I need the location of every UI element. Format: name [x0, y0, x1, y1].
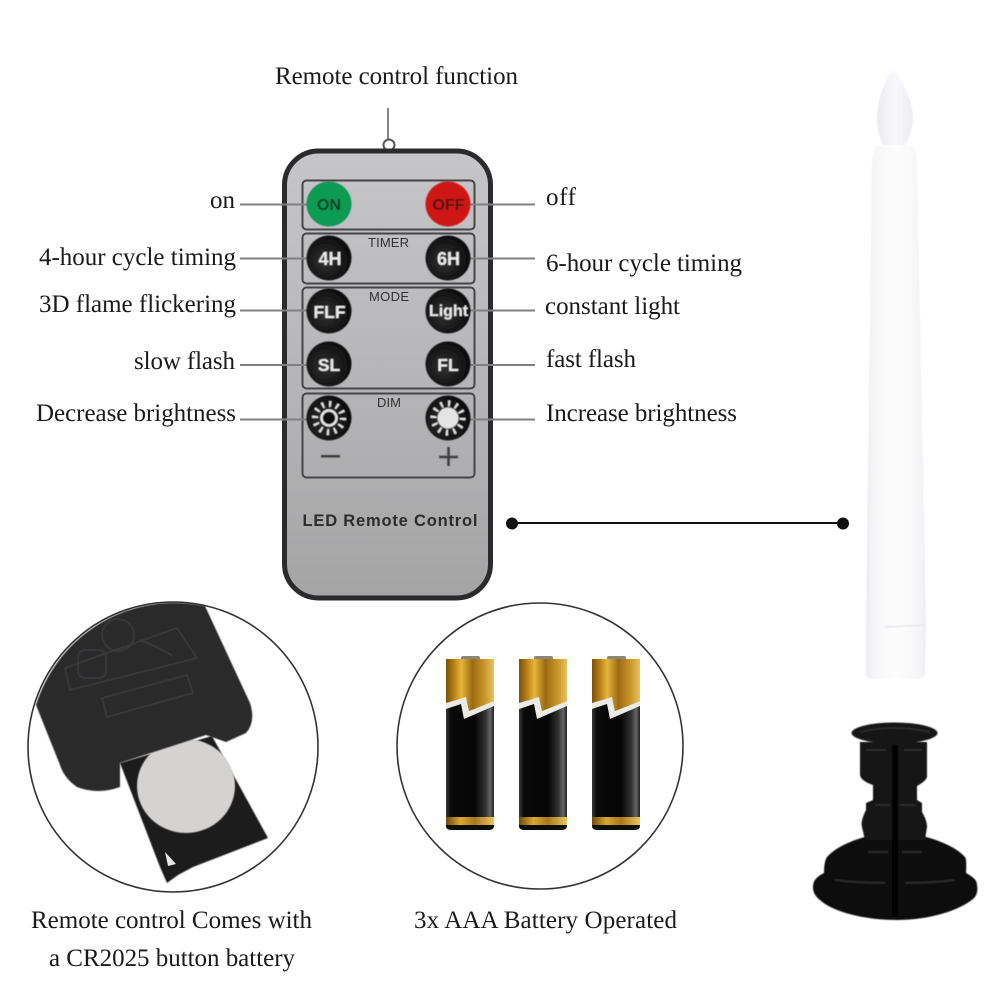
circle outline [397, 603, 683, 889]
holder highlights [835, 728, 955, 883]
caption: coin battery: a CR2025 button battery [49, 945, 296, 972]
holder dome base [824, 837, 966, 885]
timer section: TIMER [368, 235, 409, 250]
labels left: 4-hour cycle timing [39, 244, 236, 271]
battery 1 [446, 656, 494, 830]
labels right: fast flash [546, 346, 636, 373]
dim section [302, 394, 474, 478]
candle flame [877, 70, 913, 145]
title: Remote control function [275, 63, 518, 90]
button: SL: SL [318, 355, 340, 375]
button: FL: FL [437, 355, 459, 375]
button: 4H [306, 236, 352, 280]
labels right: off [546, 184, 577, 211]
holder rim [852, 722, 938, 744]
holder cup and stem [860, 742, 927, 840]
labels right [545, 184, 742, 427]
button: FL [426, 342, 470, 386]
holder flange [813, 873, 977, 920]
right leader lines [466, 204, 535, 420]
button: on: ON [317, 197, 341, 214]
caption: coin battery [31, 907, 312, 972]
candle body [866, 146, 926, 679]
button: off [426, 182, 470, 226]
timer section [302, 234, 474, 284]
labels left: Decrease brightness [36, 400, 236, 427]
battery 3 [592, 656, 640, 830]
button: decrease brightness [306, 396, 352, 440]
remote body [284, 151, 490, 598]
button: FLF [306, 288, 352, 334]
tray notch [165, 852, 176, 866]
button: off: OFF [432, 197, 465, 214]
dim section: DIM [377, 395, 401, 410]
plus sign [439, 447, 458, 466]
battery 2 [519, 656, 567, 830]
remote buttons [306, 182, 470, 466]
holder center shadow [892, 745, 898, 917]
labels right: Increase brightness [546, 400, 737, 427]
labels right: constant light [545, 293, 680, 320]
remote brand label: LED Remote Control [302, 512, 478, 530]
candle [866, 70, 926, 679]
labels left [36, 187, 236, 427]
button: on [306, 182, 352, 226]
battery tray [120, 736, 268, 883]
button: SL [306, 342, 352, 386]
button: increase brightness [426, 396, 470, 440]
caption: coin battery: Remote control Comes with [31, 907, 312, 934]
button: 6H [426, 236, 470, 280]
button: 4H: 4H [318, 249, 342, 269]
AAA battery circle [397, 603, 683, 889]
CR2025 coin cell [137, 739, 235, 833]
button: Light [426, 288, 470, 334]
button: FLF: FLF [313, 302, 346, 322]
remote back [36, 603, 252, 791]
on/off section [302, 180, 474, 230]
embossed markings [65, 619, 197, 717]
mode section [302, 288, 474, 388]
remote control [284, 108, 490, 598]
labels left: slow flash [134, 348, 236, 375]
remote hanging loop [384, 108, 394, 150]
connector line between remote and candle [506, 518, 849, 530]
labels left: 3D flame flickering [39, 291, 236, 318]
candle holder [813, 722, 977, 920]
labels right: 6-hour cycle timing [546, 250, 742, 277]
coin battery circle [28, 602, 318, 892]
left leader lines [240, 204, 310, 420]
circle outline [28, 602, 318, 892]
labels left: on [210, 187, 236, 214]
mode section: MODE [369, 289, 409, 304]
caption: AAA batteries: 3x AAA Battery Operated [414, 907, 678, 934]
candle base seam [885, 625, 926, 627]
button: Light: Light [429, 303, 469, 320]
button: 6H: 6H [437, 249, 460, 269]
minus sign [321, 455, 340, 458]
